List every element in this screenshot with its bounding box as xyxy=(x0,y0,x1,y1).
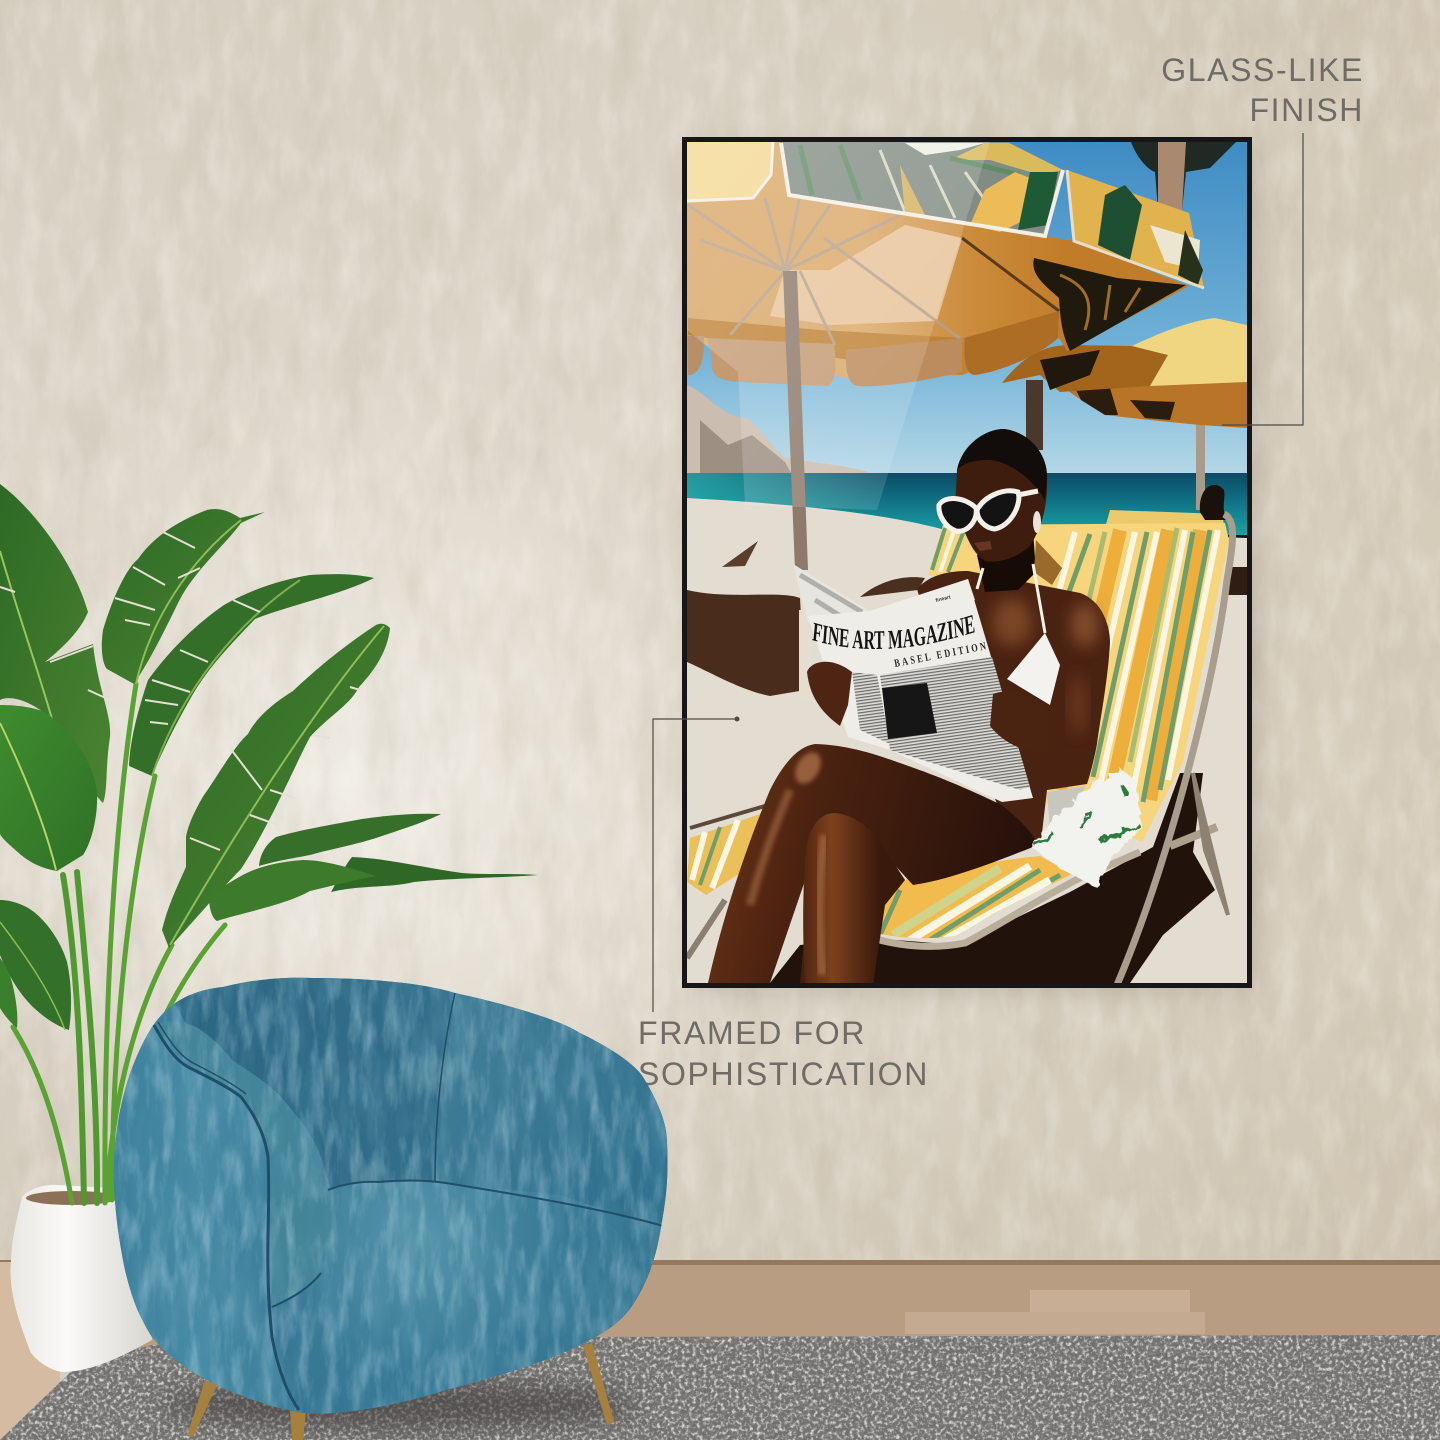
scarf xyxy=(1034,540,1062,585)
knit cuff xyxy=(1047,786,1085,830)
arm highlight xyxy=(1071,675,1085,735)
chair metal frame xyxy=(687,514,1233,985)
distant figure xyxy=(1200,485,1228,520)
chest highlight xyxy=(992,598,1032,646)
umbrella scallops xyxy=(688,311,1059,386)
magazine masthead small: fineart xyxy=(935,594,952,604)
callout label: GLASS-LIKE xyxy=(1161,52,1364,88)
sand shadow right xyxy=(1228,567,1247,595)
frame xyxy=(682,137,1252,988)
back umbrella xyxy=(1002,318,1247,510)
chair seat xyxy=(272,1181,680,1420)
chair shadow on rug xyxy=(160,1381,640,1429)
shin highlight xyxy=(750,790,790,905)
umbrella tropical top xyxy=(687,142,1204,288)
shoulder highlight xyxy=(1071,603,1099,647)
callout: glass-like finish xyxy=(1161,52,1364,425)
leaf: right upper xyxy=(259,814,441,866)
chair arm top xyxy=(154,1021,335,1307)
plant xyxy=(0,484,538,1372)
sky xyxy=(687,142,1247,477)
chair body xyxy=(100,970,680,1420)
leaf: long upper xyxy=(129,574,374,776)
neck xyxy=(977,530,1036,592)
magazine xyxy=(794,564,1033,802)
floor xyxy=(0,1260,1440,1440)
torso xyxy=(917,571,1110,850)
towel xyxy=(1030,768,1142,888)
leaf: upper left large xyxy=(0,484,110,803)
leaf: lower left xyxy=(0,900,71,1030)
back page xyxy=(793,564,975,660)
head xyxy=(955,429,1047,562)
leaf: front bright xyxy=(0,705,97,871)
chair seat xyxy=(865,850,1080,945)
framed artwork xyxy=(682,137,1252,988)
knee highlight xyxy=(790,748,826,788)
pot xyxy=(10,1185,152,1372)
front page xyxy=(808,579,1033,802)
leaf: right long xyxy=(331,857,538,892)
woman xyxy=(708,429,1110,985)
glass reflection xyxy=(687,142,990,510)
shin and thigh xyxy=(708,744,1037,983)
magazine subtitle: BASEL EDITION xyxy=(893,640,989,670)
callout: framed for sophistication xyxy=(638,716,929,1092)
print columns xyxy=(852,672,890,744)
shadow behind frame xyxy=(690,148,1260,994)
hands xyxy=(807,662,1050,752)
leaf: right low xyxy=(209,860,376,921)
main umbrella underside xyxy=(687,142,1189,378)
leaf: top centre xyxy=(102,509,265,684)
sand xyxy=(687,498,1247,983)
umbrella dark swirl xyxy=(1033,258,1186,351)
armchair xyxy=(100,970,680,1440)
second knee highlight xyxy=(819,835,824,975)
chair inner back xyxy=(160,975,460,1190)
magazine title: FINE ART MAGAZINE xyxy=(812,615,975,649)
callout leader line xyxy=(1222,133,1303,425)
chair right back xyxy=(435,985,680,1235)
sea xyxy=(687,473,1247,535)
sunglasses xyxy=(939,491,1038,531)
second leg xyxy=(803,813,905,985)
bikini xyxy=(977,564,1060,705)
rug xyxy=(0,1330,1440,1440)
leaf: small low xyxy=(0,958,17,1028)
umbrella pole xyxy=(783,271,808,570)
hair xyxy=(957,429,1047,500)
lips xyxy=(974,541,992,551)
cliff xyxy=(687,385,868,482)
lounge chair canvas xyxy=(928,523,1229,842)
callout label: FINISH xyxy=(1250,92,1364,128)
leaf: large centre xyxy=(162,624,390,948)
umbrella lit panel xyxy=(770,225,962,325)
small back chair xyxy=(1106,510,1224,524)
soil xyxy=(26,1191,118,1205)
palm xyxy=(1131,142,1236,210)
chair shadow xyxy=(770,773,1215,983)
chair foot section xyxy=(687,812,766,895)
chair piping and seams xyxy=(154,993,663,1410)
callout label: SOPHISTICATION xyxy=(638,1056,929,1092)
umbrella rim band xyxy=(688,318,1059,375)
earring xyxy=(1033,511,1041,533)
velvet texture light xyxy=(100,970,680,1420)
chair legs xyxy=(187,1343,614,1440)
umbrella ribs xyxy=(688,195,962,345)
velvet texture dark xyxy=(100,970,680,1420)
stems xyxy=(13,684,225,1203)
magazine photo xyxy=(882,683,937,739)
callout leader line xyxy=(653,719,737,1012)
sand shadow xyxy=(687,590,805,696)
chair arm front xyxy=(100,1000,299,1420)
callout label: FRAMED FOR xyxy=(638,1015,866,1051)
